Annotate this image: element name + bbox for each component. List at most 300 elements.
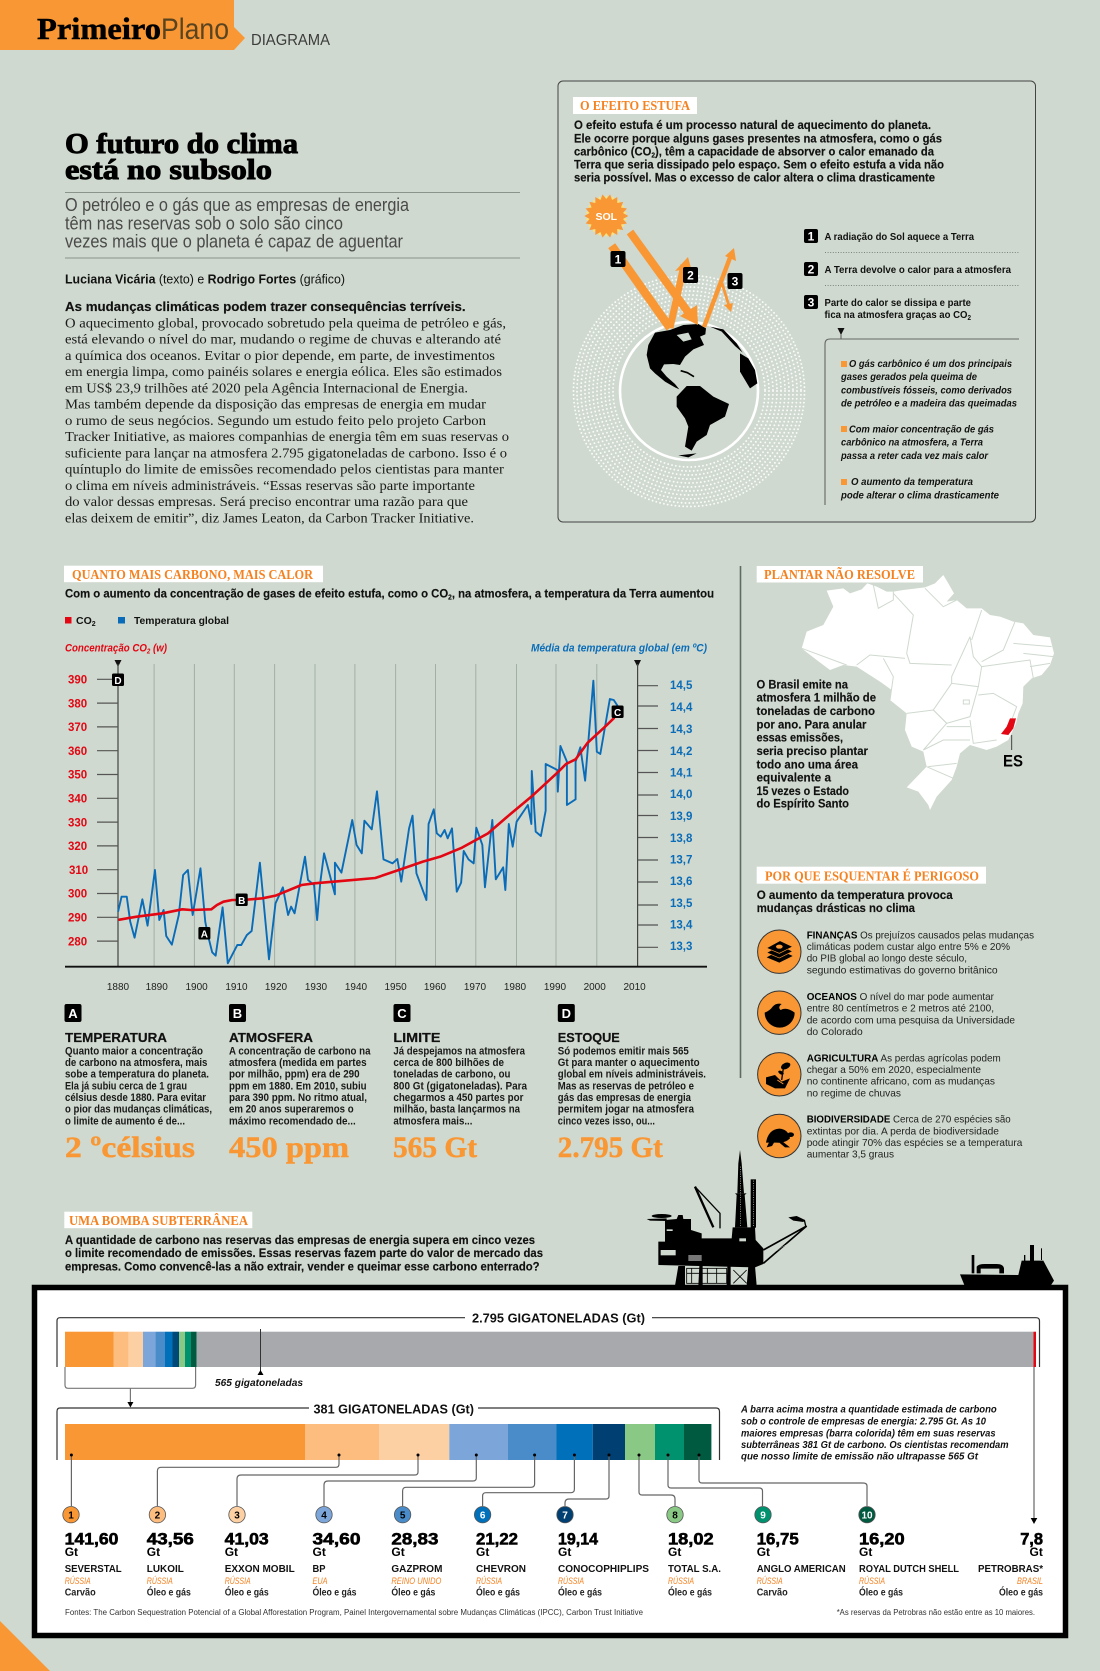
- marker A: A: [201, 930, 208, 940]
- company 10: Royal Dutch Shell: Gt: [859, 1545, 872, 1559]
- text: finanças: do PIB global ao longo deste século,: [807, 953, 967, 965]
- company 9: Anglo American: 16,75: [757, 1529, 799, 1548]
- company 2: Lukoil: RÚSSIA: [147, 1576, 173, 1586]
- column B: atmosfera: atmosfera (medida em partes: [229, 1057, 367, 1069]
- legend: steps: 2: [808, 262, 815, 276]
- subtitle: têm nas reservas sob o solo são cinco: [65, 213, 343, 233]
- company 2: Lukoil: 2: [155, 1510, 161, 1522]
- icon: sun: [582, 192, 631, 240]
- company 6: Chevron: 21,22: [476, 1529, 518, 1548]
- chart legend: Temperatura global: [134, 615, 229, 627]
- marker 2: [683, 267, 698, 283]
- x axis: 1880: [107, 982, 130, 993]
- company 3: Exxon Mobil: [225, 1506, 295, 1599]
- marker B: B: [238, 896, 245, 907]
- company 9: Anglo American: ANGLO AMERICAN: [757, 1563, 846, 1575]
- marker C: C: [614, 708, 621, 719]
- text: Brazil emissions: do Espírito Santo: [756, 796, 849, 810]
- text: oceanos: entre 80 centímetros e 2 metros até 2100,: [807, 1003, 994, 1015]
- marker D: [112, 674, 124, 687]
- right axis: 13,7: [670, 854, 692, 866]
- legend: steps: A radiação do Sol aquece a Terra: [824, 231, 974, 243]
- column C: limite: C: [397, 1006, 407, 1021]
- intro text block: o rumo de seus negócios. Segundo um estudo feito pelo projeto Carbon: [65, 414, 486, 429]
- column B: atmosfera: A concentração de carbono na: [229, 1045, 371, 1057]
- company 1: Severstal: 1: [68, 1510, 74, 1522]
- x axis: 1940: [345, 982, 368, 993]
- company 9: Anglo American: [755, 1506, 846, 1599]
- panel: O efeito estufa: [558, 81, 1036, 522]
- right axis: 14,0: [670, 789, 692, 801]
- legend: steps: 3: [808, 296, 815, 310]
- x axis: 1930: [305, 982, 328, 993]
- x axis: 1890: [146, 982, 168, 993]
- text: finanças: [807, 929, 1034, 977]
- column A: temperatura: célsius desde 1880. Para evitar: [65, 1092, 207, 1104]
- company 5: Gazprom: Gt: [391, 1545, 405, 1559]
- icon: plant in hand: [758, 1053, 801, 1096]
- callout: CO2 effects: gases gerados pela queima de: [840, 371, 977, 383]
- icon: money: [758, 930, 801, 973]
- company 8: Total: 18,02: [668, 1529, 714, 1548]
- company 3: Exxon Mobil: 41,03: [225, 1529, 269, 1548]
- text: bomb intro: o limite recomendado de emissões. Essas reservas fazem parte do valor de mercado das: [65, 1246, 543, 1260]
- icon: ocean: [758, 991, 801, 1034]
- greenhouse intro text: O efeito estufa é um processo natural de aquecimento do planeta.: [574, 118, 931, 132]
- column B: atmosfera: para 390 ppm. No ritmo atual,: [229, 1092, 367, 1104]
- intro text block: o clima em níveis administráveis. “Essas reservas são parte importante: [65, 479, 475, 494]
- column C: limite: toneladas de carbono, ou: [393, 1069, 510, 1081]
- company 9: Anglo American: Gt: [757, 1545, 770, 1559]
- column A: temperatura: Quanto maior a concentração: [65, 1045, 203, 1057]
- explanation text: subterrâneas 381 Gt de carbono. Os cientistas recomendam: [741, 1439, 1009, 1451]
- legend: steps: [804, 229, 1020, 322]
- column D: estoque: ESTOQUE: [558, 1030, 620, 1045]
- x axis: 1910: [225, 982, 248, 993]
- panel: Por que esquentar é perigoso: [757, 867, 1034, 1161]
- right axis: 14,3: [670, 724, 692, 736]
- company 7: ConocoPhillips: 7: [562, 1510, 568, 1522]
- text: bomb intro: empresas. Como convencê-las a não extrair, vender e queimar esse carbono enterrado?: [65, 1260, 540, 1274]
- left axis: 330: [68, 817, 87, 829]
- company 8: Total: 8: [672, 1510, 678, 1522]
- x axis: 2000: [584, 982, 606, 993]
- company 1: Severstal: Gt: [65, 1545, 78, 1559]
- company 10: Royal Dutch Shell: Óleo e gás: [859, 1586, 903, 1599]
- label: 565 gigatoneladas: [215, 1329, 303, 1389]
- text: agricultura: chegar a 50% em 2020, especialmente: [807, 1064, 981, 1076]
- intro text block: Mas também depende da disposição das empresas de energia em mudar: [65, 398, 486, 413]
- company 4: BP: EUA: [312, 1576, 328, 1586]
- column C: limite: [393, 1004, 528, 1164]
- vertical divider: [740, 566, 742, 1078]
- marker A: [198, 927, 210, 940]
- company 2: Lukoil: Gt: [147, 1545, 160, 1559]
- heading: O efeito estufa: O EFEITO ESTUFA: [580, 99, 691, 114]
- panel: Carbon reserves: [34, 1288, 1066, 1636]
- left axis: 290: [68, 912, 87, 924]
- text: Brazil emissions: O Brasil emite na: [756, 677, 848, 691]
- intro text block: [65, 299, 509, 526]
- explanation text: maiores empresas (barra colorida) têm em suas reservas: [741, 1428, 996, 1440]
- company 7: ConocoPhillips: 19,14: [558, 1529, 599, 1548]
- intro text block: em energia limpa, como painéis solares e energia eólica. Eles são estimados: [65, 365, 502, 380]
- company 9: Anglo American: RÚSSIA: [757, 1576, 783, 1586]
- company 1: Severstal: SEVERSTAL: [65, 1563, 122, 1575]
- text: Brazil emissions: equivalente a: [756, 771, 831, 785]
- company 10: Royal Dutch Shell: 10: [861, 1510, 873, 1522]
- marker 2: 2: [687, 268, 694, 282]
- company 4: BP: 34,60: [312, 1529, 360, 1548]
- legend: steps: Parte do calor se dissipa e parte: [824, 297, 971, 309]
- subtitle: O petróleo e o gás que as empresas de energia: [65, 195, 410, 215]
- panel: Plantar não resolve: [756, 565, 1054, 810]
- footnote: *As reservas da Petrobras não estão entre as 10 maiores.: [837, 1608, 1035, 1617]
- company 6: Chevron: RÚSSIA: [476, 1576, 502, 1586]
- connectors: [70, 1367, 1037, 1524]
- text: finanças: FINANÇAS Os prejuízos causados pelas mudanças: [807, 929, 1034, 941]
- right axis: 13,5: [670, 898, 693, 910]
- column C: limite: 565 Gt: [393, 1131, 477, 1164]
- company 1: Severstal: 141,60: [65, 1529, 118, 1548]
- icon: turtle: [758, 1114, 801, 1158]
- text: biodiversidade: BIODIVERSIDADE Cerca de 270 espécies são: [807, 1114, 1011, 1126]
- dotted atmosphere ring: [574, 276, 804, 506]
- column D: estoque: cinco vezes isso, ou...: [558, 1115, 655, 1127]
- column C: limite: chegarmos a 450 partes por: [393, 1092, 524, 1104]
- subheading: mudanças drásticas no clima: [757, 901, 915, 915]
- greenhouse intro text: carbônico (CO: [574, 144, 657, 158]
- column D: estoque: [558, 1004, 706, 1164]
- company 2: Lukoil: [147, 1506, 194, 1599]
- company 10: Royal Dutch Shell: ROYAL DUTCH SHELL: [859, 1563, 960, 1575]
- company 7: ConocoPhillips: RÚSSIA: [558, 1576, 584, 1586]
- column B: atmosfera: 450 ppm: [229, 1131, 349, 1164]
- company 4: BP: BP: [312, 1563, 326, 1575]
- label: 565 gigatoneladas: 565 gigatoneladas: [215, 1377, 303, 1389]
- icon: sun: SOL: [596, 211, 618, 223]
- company 2: Lukoil: 43,56: [147, 1529, 194, 1548]
- column C: limite: cerca de 800 bilhões de: [393, 1057, 504, 1069]
- column A: temperatura: o limite de aumento é de...: [65, 1115, 185, 1127]
- column D: estoque: Mas as reservas de petróleo e: [558, 1080, 694, 1092]
- x axis: 1970: [464, 982, 487, 993]
- company 3: Exxon Mobil: Gt: [225, 1545, 238, 1559]
- callout: CO2 effects: pode alterar o clima drasticamente: [840, 489, 999, 501]
- x axis: [65, 967, 707, 993]
- text: Brazil emissions: por ano. Para anular: [756, 717, 867, 731]
- heading: Plantar não resolve: PLANTAR NÃO RESOLVE: [764, 565, 915, 583]
- company: Petrobras: Gt: [1030, 1545, 1043, 1559]
- axis titles: Concentração CO: [65, 643, 158, 655]
- explanation text: A barra acima mostra a quantidade estimada de carbono: [740, 1404, 997, 1416]
- marker B: [236, 894, 248, 907]
- company 1: Severstal: [63, 1506, 122, 1599]
- legend: steps: 1: [808, 230, 815, 244]
- x axis: 1900: [185, 982, 208, 993]
- company 5: Gazprom: [391, 1506, 443, 1599]
- company 10: Royal Dutch Shell: [859, 1506, 960, 1599]
- temperature line: [118, 681, 618, 963]
- text: Brazil emissions: essas emissões,: [756, 731, 843, 745]
- column C: limite: atmosfera mais...: [393, 1115, 472, 1127]
- explanation text: que nosso limite de emissão não ultrapasse 565 Gt: [741, 1450, 978, 1462]
- x axis: 1960: [424, 982, 447, 993]
- second bar label and bracket: [57, 1401, 720, 1460]
- left axis: 360: [68, 746, 87, 758]
- column B: atmosfera: em 20 anos superaremos o: [229, 1104, 354, 1116]
- column A: temperatura: 2 ºcélsius: [65, 1131, 195, 1164]
- legend: steps: A Terra devolve o calor para a atmosfera: [824, 264, 1011, 276]
- company 5: Gazprom: GAZPROM: [391, 1563, 443, 1575]
- axis titles: (w): [150, 643, 167, 655]
- text: Brazil emissions: seria preciso plantar: [756, 744, 868, 758]
- company 5: Gazprom: Óleo e gás: [391, 1586, 436, 1599]
- column B: atmosfera: ppm em 1880. Em 2010, subiu: [229, 1080, 367, 1092]
- company 8: Total: [667, 1506, 721, 1599]
- intro text block: quíntuplo do limite de emissões recomendado pelos cientistas para manter: [65, 463, 504, 478]
- company: Petrobras: PETROBRAS*: [978, 1563, 1044, 1575]
- subtitle: [65, 192, 520, 258]
- company: Petrobras: Óleo e gás: [999, 1586, 1043, 1599]
- column A: temperatura: o pior das mudanças climáticas,: [65, 1104, 212, 1116]
- subtitle: vezes mais que o planeta é capaz de aguentar: [65, 232, 403, 252]
- text: biodiversidade: extintas por dia. A perda de biodiversidade: [807, 1125, 999, 1137]
- company 8: Total: Óleo e gás: [668, 1586, 712, 1599]
- label: ES: ES: [1003, 753, 1023, 771]
- column D: estoque: permitem jogar na atmosfera: [558, 1104, 695, 1116]
- left axis: [68, 660, 122, 967]
- callout: CO2 effects: de petróleo e a madeira das queimadas: [841, 397, 1017, 409]
- byline: Luciana Vicária (texto) e Rodrigo Fortes (gráfico): [65, 272, 345, 286]
- right axis: 14,4: [670, 702, 693, 714]
- company 3: Exxon Mobil: 3: [234, 1510, 240, 1522]
- subheading: O aumento da temperatura provoca: [757, 888, 953, 902]
- text: biodiversidade: [807, 1114, 1022, 1161]
- right axis: 14,1: [670, 768, 693, 780]
- left axis: 370: [68, 722, 87, 734]
- text: Brazil emissions: toneladas de carbono: [756, 704, 875, 718]
- header band: Primeiro Plano: [0, 0, 330, 50]
- title: está no subsolo: [65, 154, 272, 186]
- company 6: Chevron: 6: [480, 1510, 486, 1522]
- subheading: [757, 888, 953, 915]
- header band: Primeiro Plano: Primeiro: [37, 11, 161, 46]
- bar: 2795 Gt: [65, 1332, 1036, 1367]
- column A: temperatura: [64, 1004, 212, 1164]
- heading: Quanto mais carbono: QUANTO MAIS CARBONO, MAIS CALOR: [72, 568, 314, 583]
- text: oceanos: de acordo com uma pesquisa da Universidade: [807, 1014, 1015, 1026]
- greenhouse intro text: [574, 118, 944, 184]
- line chart: CO2 and temperature: [65, 660, 707, 993]
- callout: CO2 effects: [825, 328, 1019, 505]
- icon: ship: [960, 1245, 1054, 1287]
- intro text block: As mudanças climáticas podem trazer consequências terríveis.: [65, 299, 466, 314]
- left axis: 350: [68, 770, 87, 782]
- text: Brazil emissions: [756, 677, 876, 810]
- column A: temperatura: de carbono na atmosfera, mais: [65, 1057, 207, 1069]
- right axis: 13,3: [670, 941, 692, 953]
- title: [65, 128, 299, 186]
- text: agricultura: no continente africano, com as mudanças: [807, 1076, 995, 1088]
- column B: atmosfera: [229, 1004, 371, 1164]
- column B: atmosfera: por milhão, ppm) era de 290: [229, 1069, 360, 1081]
- intro text block: suficiente para lançar na atmosfera 2.795 gigatoneladas de carbono. Isso é o: [65, 446, 507, 462]
- text: finanças: climáticas podem custar algo entre 5% e 20%: [807, 941, 1010, 953]
- x axis: 1980: [504, 982, 527, 993]
- company 4: BP: 4: [321, 1510, 327, 1522]
- title: O futuro do clima: [65, 128, 299, 160]
- column D: estoque: Gt para manter o aquecimento: [558, 1057, 700, 1069]
- corner triangle: [0, 1621, 50, 1671]
- marker 3: 3: [732, 274, 739, 288]
- column B: atmosfera: ATMOSFERA: [229, 1030, 314, 1045]
- column A: temperatura: A: [68, 1006, 78, 1021]
- intro text block: Tracker Initiative, as maiores companhias de energia têm em suas reservas o: [65, 430, 509, 445]
- text: Brazil emissions: todo ano uma área: [756, 757, 858, 771]
- callout: CO2 effects: Com maior concentração de gás: [849, 423, 994, 435]
- callout: CO2 effects: O aumento da temperatura: [851, 476, 973, 488]
- CO2 line: [119, 718, 614, 920]
- column C: limite: 800 Gt (gigatoneladas). Para: [393, 1080, 528, 1092]
- company 10: Royal Dutch Shell: 16,20: [859, 1529, 905, 1548]
- column C: limite: LIMITE: [393, 1030, 441, 1045]
- company 1: Severstal: RÚSSIA: [65, 1576, 91, 1586]
- company 9: Anglo American: 9: [760, 1510, 766, 1522]
- company 7: ConocoPhillips: CONOCOPHIPLIPS: [558, 1563, 649, 1575]
- text: finanças: segundo estimativas do governo britânico: [807, 965, 998, 977]
- right axis: 13,4: [670, 920, 693, 932]
- greenhouse intro text: Terra que seria dissipado pelo espaço. Sem o efeito estufa a vida não: [574, 158, 944, 172]
- column A: temperatura: Ela já subiu cerca de 1 grau: [65, 1080, 187, 1092]
- company 4: BP: [312, 1506, 360, 1599]
- text: oceanos: OCEANOS O nível do mar pode aumentar: [807, 991, 994, 1003]
- company 7: ConocoPhillips: Gt: [558, 1545, 571, 1559]
- marker 3: [728, 273, 742, 289]
- intro text block: do valor dessas empresas. Será preciso encontrar uma razão para que: [65, 495, 468, 510]
- explanation text: [740, 1404, 1009, 1462]
- right axis: 13,9: [670, 811, 692, 823]
- column D: estoque: global em níveis administráveis.: [558, 1069, 706, 1081]
- company 3: Exxon Mobil: EXXON MOBIL: [225, 1563, 295, 1575]
- greenhouse intro text: ), têm a capacidade de absorver o calor emanado da: [655, 144, 934, 158]
- heading: Por que esquentar: POR QUE ESQUENTAR É PERIGOSO: [765, 868, 979, 885]
- header band: Primeiro Plano: DIAGRAMA: [251, 32, 330, 49]
- x axis: 2010: [623, 982, 646, 993]
- callout: CO2 effects: carbônico na atmosfera, a Terra: [841, 437, 983, 449]
- left axis: 310: [69, 865, 88, 877]
- map: Brazil: [802, 575, 1054, 810]
- marker D: D: [114, 676, 122, 687]
- expansion bracket: [65, 1367, 196, 1408]
- column C: limite: milhão, basta lançarmos na: [393, 1104, 521, 1116]
- text: Brazil emissions: atmosfera 1 milhão de: [756, 691, 876, 705]
- callout: CO2 effects: O gás carbônico é um dos principais: [849, 358, 1012, 370]
- column D: estoque: 2.795 Gt: [558, 1131, 663, 1164]
- x axis: 1950: [384, 982, 407, 993]
- company 10: Royal Dutch Shell: RÚSSIA: [859, 1576, 885, 1586]
- text: agricultura: [807, 1052, 1001, 1099]
- right axis: 14,5: [670, 680, 693, 692]
- sources: Fontes: The Carbon Sequestration Potencial of a Global Afforestation Program, Painel Intergovernamental sobre Mudanças Climáticas (IPCC), Carbon Trust Initiative: [65, 1608, 644, 1617]
- marker 1: [610, 251, 626, 267]
- text: agricultura: AGRICULTURA As perdas agrícolas podem: [807, 1052, 1001, 1064]
- company 3: Exxon Mobil: Óleo e gás: [225, 1586, 269, 1599]
- right axis: 14,2: [670, 746, 692, 758]
- company 8: Total: TOTAL S.A.: [668, 1563, 721, 1575]
- axis titles: 2: [146, 649, 150, 656]
- callout: CO2 effects: passa a reter cada vez mais calor: [840, 450, 989, 462]
- company 5: Gazprom: 28,83: [391, 1529, 438, 1548]
- icon: oil rig: [647, 1150, 807, 1286]
- company: Petrobras: BRASIL: [1017, 1576, 1043, 1586]
- greenhouse intro text: seria possível. Mas o excesso de calor altera o clima drasticamente: [574, 170, 935, 184]
- total bar label and bracket: [57, 1311, 1040, 1367]
- company 2: Lukoil: Óleo e gás: [147, 1586, 191, 1599]
- left axis: 280: [68, 936, 87, 948]
- column A: temperatura: TEMPERATURA: [65, 1030, 168, 1045]
- greenhouse intro text: 2: [651, 152, 655, 160]
- company: Petrobras: [978, 1529, 1044, 1599]
- company 7: ConocoPhillips: [557, 1506, 649, 1599]
- arrows: radiation and heat: [612, 232, 736, 328]
- column D: estoque: gás das empresas de energia: [558, 1092, 692, 1104]
- x axis: 1920: [265, 982, 288, 993]
- company 4: BP: Gt: [312, 1545, 326, 1559]
- axis titles: [65, 643, 707, 656]
- company 2: Lukoil: LUKOIL: [147, 1563, 184, 1575]
- chart legend: [65, 615, 229, 628]
- company 9: Anglo American: Carvão: [757, 1588, 788, 1599]
- company 8: Total: RÚSSIA: [668, 1576, 694, 1586]
- company 6: Chevron: Gt: [476, 1545, 489, 1559]
- text: bomb intro: A quantidade de carbono nas reservas das empresas de energia supera em cinco vezes: [65, 1233, 535, 1247]
- column D: estoque: Só podemos emitir mais 565: [558, 1045, 689, 1057]
- total bar label and bracket: 2.795 GIGATONELADAS (Gt): [472, 1311, 645, 1326]
- icon: globe: [620, 322, 758, 460]
- axis titles: Média da temperatura global (em ºC): [531, 643, 707, 655]
- left axis: 320: [68, 841, 87, 853]
- column D: estoque: D: [562, 1006, 571, 1021]
- column C: limite: Já despejamos na atmosfera: [393, 1045, 526, 1057]
- company 5: Gazprom: 5: [400, 1510, 406, 1522]
- right axis: 13,6: [670, 876, 692, 888]
- company 7: ConocoPhillips: Óleo e gás: [558, 1586, 602, 1599]
- company 6: Chevron: CHEVRON: [476, 1563, 526, 1575]
- intro text block: elas deixem de emitir”, diz James Leaton, da Carbon Tracker Initiative.: [65, 512, 474, 526]
- text: biodiversidade: aumentar 3,5 graus: [807, 1149, 894, 1161]
- text: bomb intro: [65, 1233, 543, 1274]
- chart subtitle: 2: [448, 595, 452, 602]
- second bar label and bracket: 381 GIGATONELADAS (Gt): [314, 1401, 474, 1416]
- right axis: 13,8: [670, 833, 693, 845]
- x axis: 1990: [544, 982, 567, 993]
- chart legend: CO: [76, 615, 92, 627]
- explanation text: sob o controle de empresas de energia: 2.795 Gt. As 10: [741, 1415, 986, 1427]
- marker C: [612, 706, 624, 719]
- company 6: Chevron: Óleo e gás: [476, 1586, 520, 1599]
- left axis: 300: [68, 889, 87, 901]
- text: oceanos: do Colorado: [807, 1026, 863, 1038]
- right axis: [634, 660, 693, 967]
- left axis: 340: [68, 794, 87, 806]
- company 8: Total: Gt: [668, 1545, 681, 1559]
- chart legend: 2: [92, 621, 96, 628]
- intro text block: O aquecimento global, provocado sobretudo pela queima de petróleo e gás,: [65, 316, 506, 331]
- intro text block: a química dos oceanos. Evitar o pior depende, em parte, de investimentos: [65, 349, 495, 364]
- column B: atmosfera: máximo recomendado de...: [229, 1115, 356, 1127]
- column B: atmosfera: B: [233, 1006, 242, 1021]
